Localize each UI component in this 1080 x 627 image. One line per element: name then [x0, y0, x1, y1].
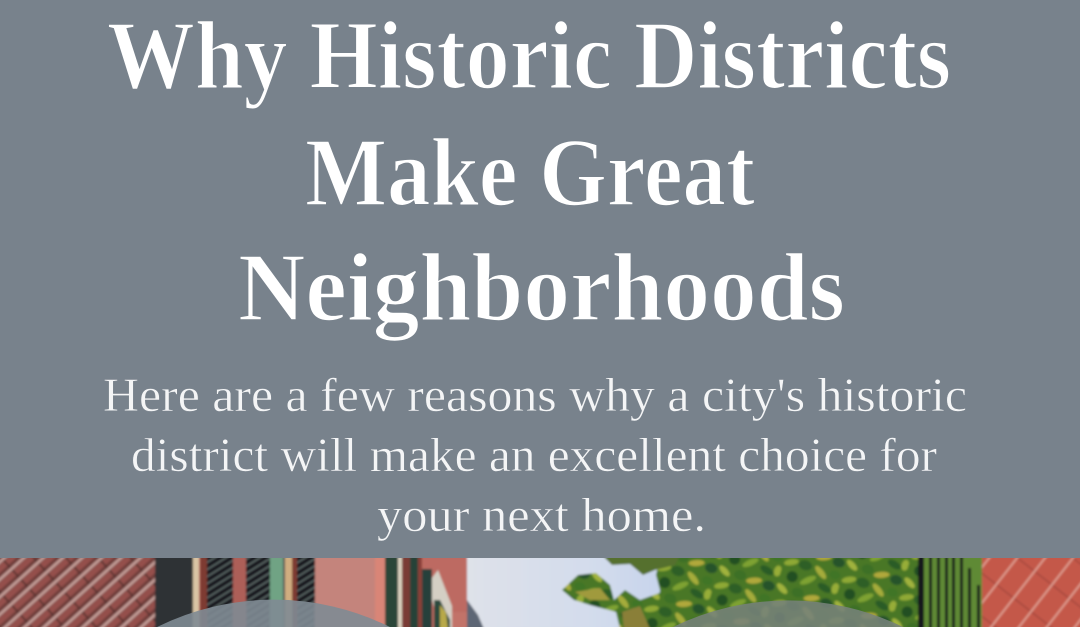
title: Neighborhoods	[238, 234, 845, 342]
title: Make Great	[305, 119, 755, 227]
subtitle text block	[103, 369, 967, 542]
sky	[465, 558, 662, 627]
left brick wall	[0, 556, 156, 627]
building facade with shutters	[155, 556, 467, 627]
subtitle text block: Here are a few reasons why a city's historic	[103, 369, 967, 422]
title	[107, 2, 951, 342]
tree foliage	[562, 556, 930, 627]
translucent dome right	[673, 600, 903, 627]
iron fence	[918, 556, 982, 627]
subtitle text block: district will make an excellent choice for	[131, 429, 937, 482]
distant roof	[467, 600, 484, 627]
title: Why Historic Districts	[107, 2, 951, 110]
translucent dome left	[157, 600, 390, 627]
subtitle text block: your next home.	[377, 489, 706, 542]
right brick wall	[982, 556, 1080, 627]
photo strip: historic street	[0, 556, 1080, 627]
